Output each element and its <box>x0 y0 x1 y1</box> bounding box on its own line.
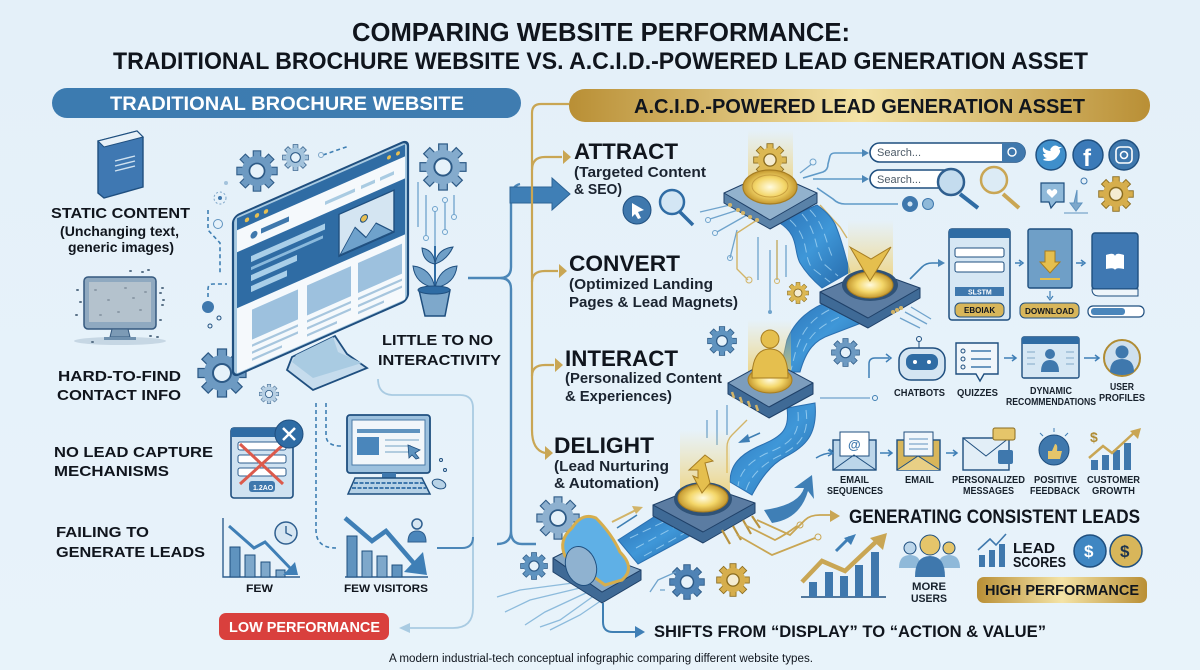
heading: traditional brochure website: TRADITIONAL BROCHURE WEBSITE <box>110 94 464 115</box>
icon: more users: MORE <box>912 581 946 593</box>
connector: to low performance <box>316 379 473 633</box>
icon: small computer <box>347 415 447 494</box>
icon: lead form crossed out <box>231 420 303 498</box>
search bar two <box>870 170 954 188</box>
chart: growth <box>801 533 887 597</box>
personalized messages icon <box>952 428 1025 497</box>
text: failing to generate leads <box>56 524 205 561</box>
email icon <box>897 432 940 486</box>
email icon: EMAIL <box>905 475 934 486</box>
text: little to no interactivity <box>378 332 501 369</box>
icon: plant with circuit lines <box>413 182 457 316</box>
title: COMPARING WEBSITE PERFORMANCE: <box>352 17 850 47</box>
social icons <box>1036 140 1139 172</box>
text: no lead capture <box>54 444 213 480</box>
user profile icon <box>1099 340 1145 404</box>
step: attract: & SEO) <box>574 181 622 198</box>
icon: lead form crossed out: 1.2AO <box>253 485 274 492</box>
caption: A modern industrial-tech conceptual infographic comparing different website types. <box>389 653 813 665</box>
flow arrows <box>869 354 1099 378</box>
search bar one <box>870 143 1025 162</box>
lead scores: SCORES <box>1013 554 1066 571</box>
step: attract <box>574 139 706 198</box>
email sequences icon <box>827 432 883 497</box>
text: no lead capture: NO LEAD CAPTURE <box>54 444 213 461</box>
static content text: STATIC CONTENT <box>51 205 190 222</box>
user profile icon: USER <box>1110 382 1135 393</box>
gears around monitor <box>198 144 466 404</box>
arrow: shifts <box>603 603 645 638</box>
heading: acid-powered asset: A.C.I.D.-POWERED LEAD GENERATION ASSET <box>634 96 1085 118</box>
step: interact <box>565 346 722 405</box>
quiz icon <box>956 343 998 399</box>
landing page form: EBOIAK <box>964 306 995 315</box>
node: interact chip <box>728 320 813 418</box>
step: convert <box>569 251 738 311</box>
step: attract: ATTRACT <box>574 139 679 164</box>
label: few visitors: FEW VISITORS <box>344 583 428 595</box>
personalized messages icon: MESSAGES <box>963 486 1014 497</box>
monitor: brochure website <box>233 140 408 377</box>
icon: grey monitor <box>74 270 166 345</box>
landing page form: SLSTM <box>968 290 992 296</box>
arrow: gold to generating leads <box>737 510 840 555</box>
step: delight: DELIGHT <box>554 433 655 458</box>
monitor stand <box>287 336 367 390</box>
landing page form <box>949 229 1010 320</box>
row: interact icons <box>869 336 1145 408</box>
text: hard to find contact info <box>57 368 181 404</box>
step: convert: CONVERT <box>569 251 681 276</box>
text: failing to generate leads: GENERATE LEADS <box>56 544 205 561</box>
static content text <box>51 205 190 255</box>
text: shifts from display to action: SHIFTS FROM “DISPLAY” TO “ACTION & VALUE” <box>654 622 1046 641</box>
chart: few <box>223 518 300 595</box>
arrow: into asset <box>510 178 570 210</box>
text: little to no interactivity: INTERACTIVITY <box>378 352 501 369</box>
static content text: (Unchanging text, <box>60 223 179 239</box>
static content text: generic images) <box>68 239 174 255</box>
heading: acid-powered asset <box>569 89 1150 122</box>
email sequences icon: @ <box>848 437 861 452</box>
node: convert chip <box>820 220 920 328</box>
text: hard to find contact info: CONTACT INFO <box>57 387 181 404</box>
text: failing to generate leads: FAILING TO <box>56 524 149 541</box>
step: interact: (Personalized Content <box>565 370 722 387</box>
connector: gold brace with branches <box>532 104 571 460</box>
search bar one: Search... <box>877 147 921 159</box>
badge: high performance: HIGH PERFORMANCE <box>985 582 1139 599</box>
step: interact: & Experiences) <box>565 388 672 405</box>
icon: cursor and magnifier <box>623 190 693 225</box>
quiz icon: QUIZZES <box>957 388 998 399</box>
personalized messages icon: PERSONALIZED <box>952 475 1025 486</box>
engagement icons <box>1041 177 1133 213</box>
step: convert: Pages & Lead Magnets) <box>569 294 738 311</box>
step: convert: (Optimized Landing <box>569 276 713 293</box>
positive feedback icon: POSITIVE <box>1034 475 1077 486</box>
step: interact: INTERACT <box>565 346 679 371</box>
chatbot icon <box>894 336 945 399</box>
icon: more users <box>899 535 960 605</box>
icon: book <box>98 131 143 198</box>
email sequences icon: EMAIL <box>840 475 869 486</box>
chart: few visitors <box>344 518 428 595</box>
text: no lead capture: MECHANISMS <box>54 463 169 480</box>
circuit lines <box>612 149 945 528</box>
icon: dollar coins: $ <box>1084 542 1094 561</box>
status dots <box>902 196 934 212</box>
gears near pipeline <box>650 282 859 599</box>
customer growth icon: $ <box>1090 429 1098 445</box>
title <box>113 17 1088 75</box>
step: delight <box>554 433 669 492</box>
label: few: FEW <box>246 583 274 595</box>
user profile icon: PROFILES <box>1099 393 1145 404</box>
dynamic recommendations icon <box>1006 337 1096 408</box>
badge: low performance <box>219 613 389 640</box>
text: little to no interactivity: LITTLE TO NO <box>382 332 493 349</box>
customer growth icon <box>1087 428 1141 497</box>
icon: more users: USERS <box>911 593 947 605</box>
icon: dollar coins <box>1074 535 1142 567</box>
customer growth icon: CUSTOMER <box>1087 475 1141 486</box>
row: delight icons <box>816 428 1141 497</box>
heading: traditional brochure website <box>52 88 521 118</box>
flow arrows <box>1015 260 1085 266</box>
download document: DOWNLOAD <box>1025 306 1074 316</box>
node: attract chip <box>724 130 817 229</box>
dynamic recommendations icon: RECOMMENDATIONS <box>1006 397 1096 408</box>
social icons: f <box>1083 145 1092 172</box>
step: delight: (Lead Nurturing <box>554 458 669 475</box>
lead scores: LEAD <box>1013 540 1055 557</box>
heading: generating consistent leads: GENERATING CONSISTENT LEADS <box>849 507 1140 528</box>
step: delight: & Automation) <box>554 475 659 492</box>
download document <box>1020 229 1079 318</box>
dynamic recommendations icon: DYNAMIC <box>1030 386 1072 397</box>
customer growth icon: GROWTH <box>1092 486 1135 497</box>
positive feedback icon: FEEDBACK <box>1030 486 1081 497</box>
badge: low performance: LOW PERFORMANCE <box>229 619 380 636</box>
data ribbon pipeline <box>618 205 864 564</box>
connector: blue brace <box>468 184 536 544</box>
ebook and progress bar <box>1088 233 1144 317</box>
badge: high performance <box>977 577 1147 603</box>
text: hard to find contact info: HARD-TO-FIND <box>58 368 181 385</box>
email sequences icon: SEQUENCES <box>827 486 883 497</box>
magnifiers <box>938 167 1019 208</box>
title: TRADITIONAL BROCHURE WEBSITE VS. A.C.I.D.-POWERED LEAD GENERATION ASSET <box>113 48 1088 75</box>
node: cloud box <box>497 497 641 630</box>
flow arrows <box>816 450 957 458</box>
arrow: blue curved <box>764 475 814 523</box>
panel: static content <box>51 131 190 255</box>
search bar two: Search... <box>877 174 921 186</box>
lead scores <box>978 534 1066 571</box>
step: attract: (Targeted Content <box>574 164 706 181</box>
row: convert icons <box>949 229 1144 320</box>
row: attract icons <box>870 140 1139 213</box>
chatbot icon: CHATBOTS <box>894 388 945 399</box>
positive feedback icon <box>1030 428 1081 497</box>
icon: dollar coins: $ <box>1120 542 1130 561</box>
node: delight chip <box>653 430 760 544</box>
